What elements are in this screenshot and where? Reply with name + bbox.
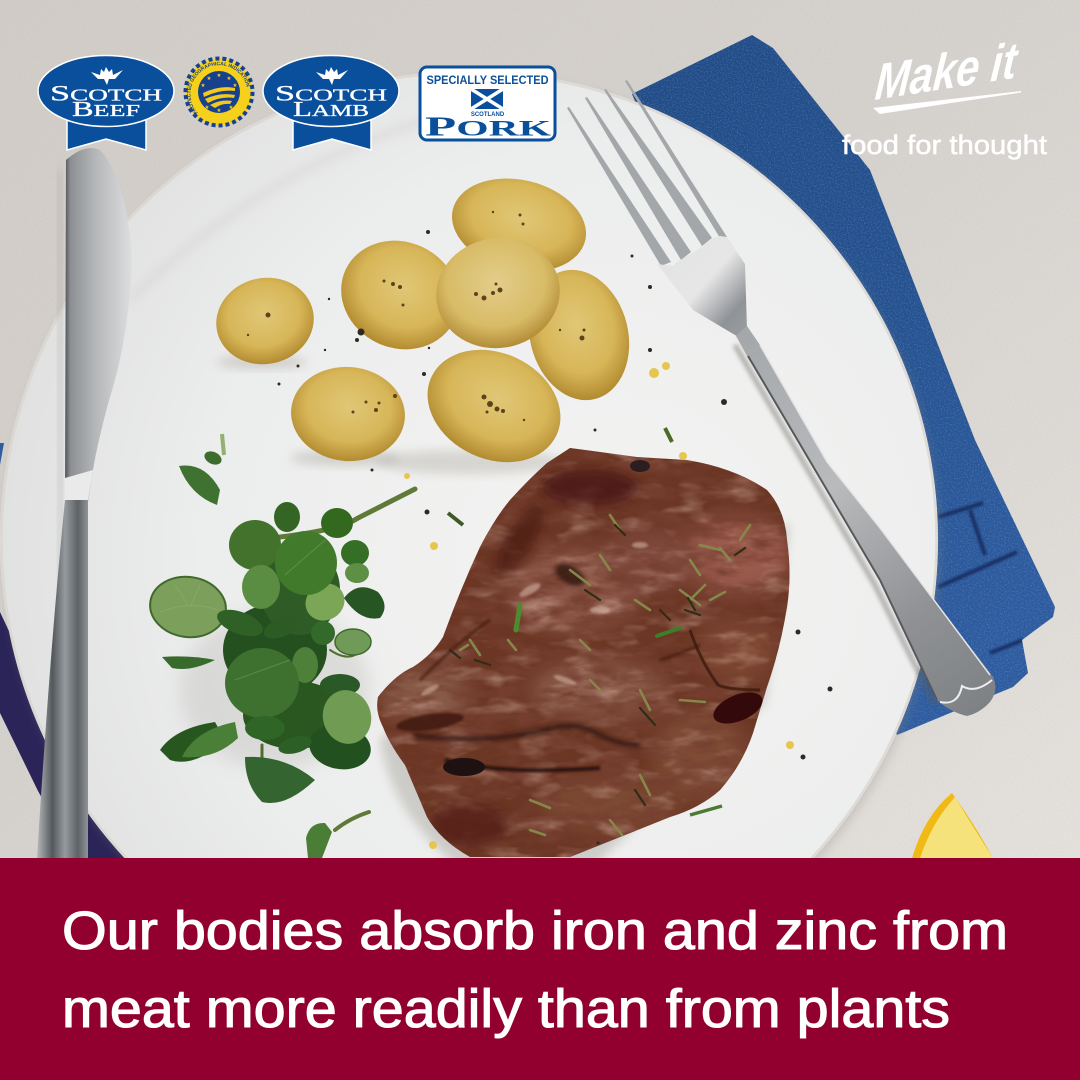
logo: Specially Selected Pork xyxy=(420,67,555,142)
logo: Scotch Beef: B EEF xyxy=(72,97,140,121)
potato: centre front xyxy=(427,228,569,358)
banner headline xyxy=(62,901,1008,1039)
logo: protected geographical indication seal: ★ xyxy=(227,76,232,82)
fork tines xyxy=(567,80,727,266)
logo: Specially Selected Pork: P ORK xyxy=(425,112,551,142)
logo: Scotch Beef xyxy=(38,56,174,150)
plate xyxy=(0,71,938,1009)
watercress loose sprig top xyxy=(179,434,224,505)
logo: protected geographical indication seal: ★ xyxy=(201,83,206,89)
watercress loose sprig bottom xyxy=(306,823,332,858)
logo: protected geographical indication seal: ★ xyxy=(233,83,238,89)
icon: thistle xyxy=(316,67,348,85)
steak colour patches xyxy=(680,517,790,593)
watercress dark centre mass xyxy=(223,604,327,696)
watercress stems xyxy=(230,489,415,830)
potato: right xyxy=(515,259,643,411)
napkin: left navy corner xyxy=(0,443,130,858)
logo: Scotch Lamb: S COTCH xyxy=(275,80,387,106)
watercress xyxy=(146,434,415,858)
steak char and folds xyxy=(413,726,640,745)
fork shadow xyxy=(735,345,935,705)
watercress leaves xyxy=(306,720,374,774)
logo: protected geographical indication seal: ★ xyxy=(229,105,234,111)
icon: thistle xyxy=(91,67,123,85)
surface texture xyxy=(0,0,1080,860)
steak herbs xyxy=(450,515,750,835)
logo: Scotch Beef: S COTCH xyxy=(50,80,162,106)
background surface xyxy=(0,0,1080,860)
potato: top back xyxy=(443,166,595,284)
logo: protected geographical indication seal: PROTECTED GEOGRAPHICAL INDICATION xyxy=(187,62,250,114)
banner headline: Our bodies absorb iron and zinc from xyxy=(62,901,1008,961)
knife blade xyxy=(65,148,132,502)
banner headline: meat more readily than from plants xyxy=(62,979,950,1039)
plate shadow xyxy=(4,77,940,1013)
potato skin specks xyxy=(247,211,586,421)
knife blade bright bolster xyxy=(65,470,93,500)
fork head xyxy=(657,236,747,338)
logo: protected geographical indication seal: ★ xyxy=(207,76,212,82)
logo: protected geographical indication seal: ★ xyxy=(205,105,210,111)
potato: upper left xyxy=(323,222,477,368)
knife xyxy=(37,148,132,858)
logo: Scotch Lamb: L AMB xyxy=(293,97,369,121)
plate crumbs and herb flecks xyxy=(404,285,832,849)
potatoes xyxy=(208,166,643,483)
icon: saltire flag xyxy=(471,89,503,109)
logo: Specially Selected Pork: SPECIALLY SELECTED xyxy=(426,75,548,87)
text: food for thought: food for thought xyxy=(842,130,1048,160)
potato: lower centre xyxy=(409,329,579,483)
logo: Specially Selected Pork: SCOTLAND xyxy=(471,112,505,118)
banner xyxy=(0,858,1080,1080)
knife handle xyxy=(37,500,88,858)
pepper specks around potatoes xyxy=(278,230,634,472)
logo: protected geographical indication seal: ★ xyxy=(217,108,222,114)
potato: left small xyxy=(208,269,322,373)
fork xyxy=(567,80,995,716)
watercress leaf veins xyxy=(160,540,325,680)
napkin: right blue napkin xyxy=(632,35,1057,735)
fork handle xyxy=(736,326,995,716)
steak gloss highlights xyxy=(420,542,648,698)
logo: protected geographical indication seal: ★ xyxy=(217,73,222,79)
logo: Scotch Lamb xyxy=(263,56,399,150)
potato: lower left xyxy=(287,362,409,466)
steak xyxy=(370,440,795,865)
logo: Make it: Make it xyxy=(873,31,1021,111)
logo: protected geographical indication seal xyxy=(184,56,254,128)
lemon wedge xyxy=(912,793,993,858)
